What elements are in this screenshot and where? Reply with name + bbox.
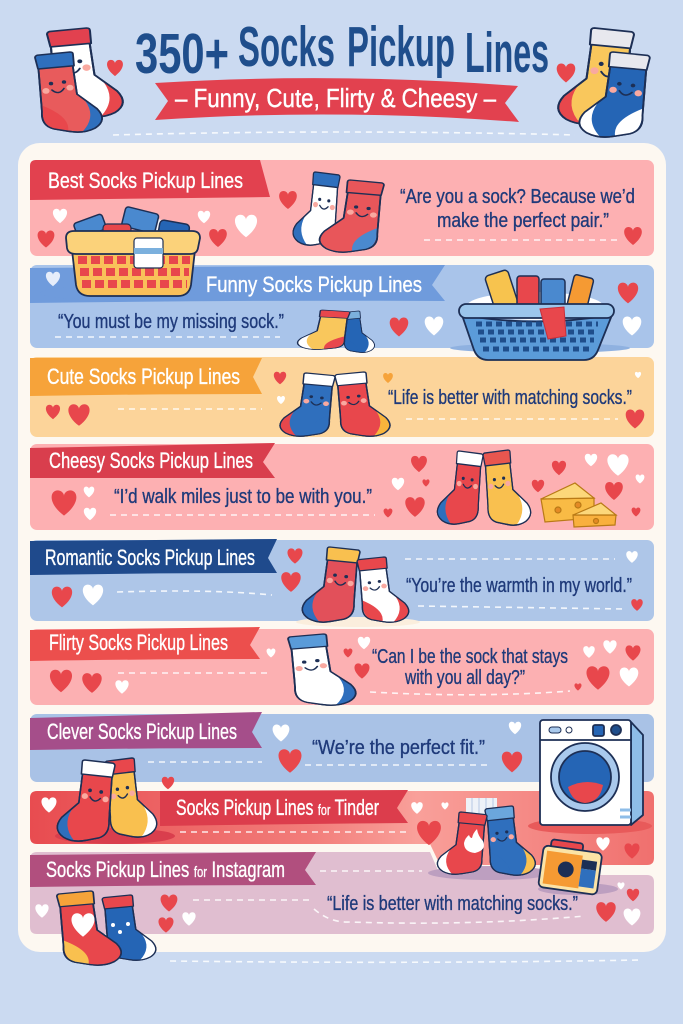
subtitle ribbon	[155, 78, 519, 122]
quote: best: “Are you a sock? Because we’d	[400, 186, 635, 208]
quote: cheesy: “I’d walk miles just to be with you.”	[114, 486, 372, 508]
heading: best: Best Socks Pickup Lines	[48, 168, 243, 193]
heading: flirty: Flirty Socks Pickup Lines	[49, 630, 228, 655]
panel: romantic socks	[30, 539, 654, 627]
heading: cheesy	[30, 443, 275, 478]
icon: washing machine	[540, 720, 643, 825]
panel: tinder socks	[30, 777, 654, 865]
icon: flame	[464, 829, 484, 853]
heading: cute	[30, 358, 262, 396]
quote: flirty: “Can I be the sock that stays	[372, 646, 568, 668]
icon: socks pair clever	[57, 758, 157, 841]
panel: instagram socks	[30, 852, 654, 934]
panel: clever socks	[30, 712, 654, 782]
quote: funny: “You must be my missing sock.”	[58, 311, 284, 333]
heading: instagram	[30, 852, 316, 887]
icon: socks pair best	[293, 172, 384, 252]
title: Lines	[465, 21, 549, 85]
icon: socks pair romantic	[296, 547, 420, 627]
panel: cheesy socks	[30, 443, 654, 530]
quote: best: make the perfect pair.”	[437, 210, 609, 232]
panel: flirty socks	[30, 627, 654, 705]
icon: small socks funny	[298, 310, 375, 353]
icon: socks pair tinder	[428, 806, 552, 880]
heading: romantic	[30, 539, 277, 575]
title: Socks	[238, 15, 335, 79]
icon: header right socks	[557, 28, 650, 137]
title	[135, 15, 549, 86]
heading: funny: Funny Socks Pickup Lines	[206, 272, 422, 297]
heading: cheesy: Cheesy Socks Pickup Lines	[49, 448, 253, 473]
icon: socks pair cute	[280, 372, 390, 436]
title: 350+	[135, 22, 229, 86]
quote: clever: “We’re the perfect fit.”	[312, 737, 485, 759]
panel: cute socks	[30, 357, 654, 437]
heading: clever	[30, 712, 262, 750]
heading: tinder	[160, 790, 408, 826]
quote: best	[400, 186, 635, 232]
icon: blue laundry basket	[450, 269, 630, 360]
icon: socks pair cheesy	[437, 450, 531, 525]
heading: clever: Clever Socks Pickup Lines	[47, 719, 237, 744]
icon: wicker laundry basket	[40, 206, 200, 300]
panel: funny socks	[30, 265, 654, 353]
heading: best	[30, 160, 270, 200]
heading: cute: Cute Socks Pickup Lines	[47, 364, 240, 389]
heading: funny	[30, 265, 445, 303]
icon: header left socks	[35, 28, 123, 132]
quote: flirty: with you all day?”	[404, 667, 525, 689]
heading: instagram: Socks Pickup Lines for Instagram	[46, 857, 285, 882]
heading: flirty	[30, 627, 260, 661]
icon: socks pair instagram	[57, 891, 156, 965]
panel: main card	[18, 143, 666, 952]
quote: instagram: “Life is better with matching socks.”	[327, 893, 578, 915]
icon: winking sock	[288, 634, 356, 705]
subtitle ribbon: – Funny, Cute, Flirty & Cheesy –	[175, 83, 496, 113]
title: Pickup	[347, 15, 455, 79]
quote: flirty	[372, 646, 568, 689]
icon: white sock behind	[466, 798, 497, 820]
heading: romantic: Romantic Socks Pickup Lines	[45, 545, 255, 570]
panel: best socks	[30, 160, 654, 256]
icon: camera	[538, 838, 618, 895]
icon: cheese	[541, 483, 616, 527]
heading: tinder: Socks Pickup Lines for Tinder	[176, 795, 379, 820]
